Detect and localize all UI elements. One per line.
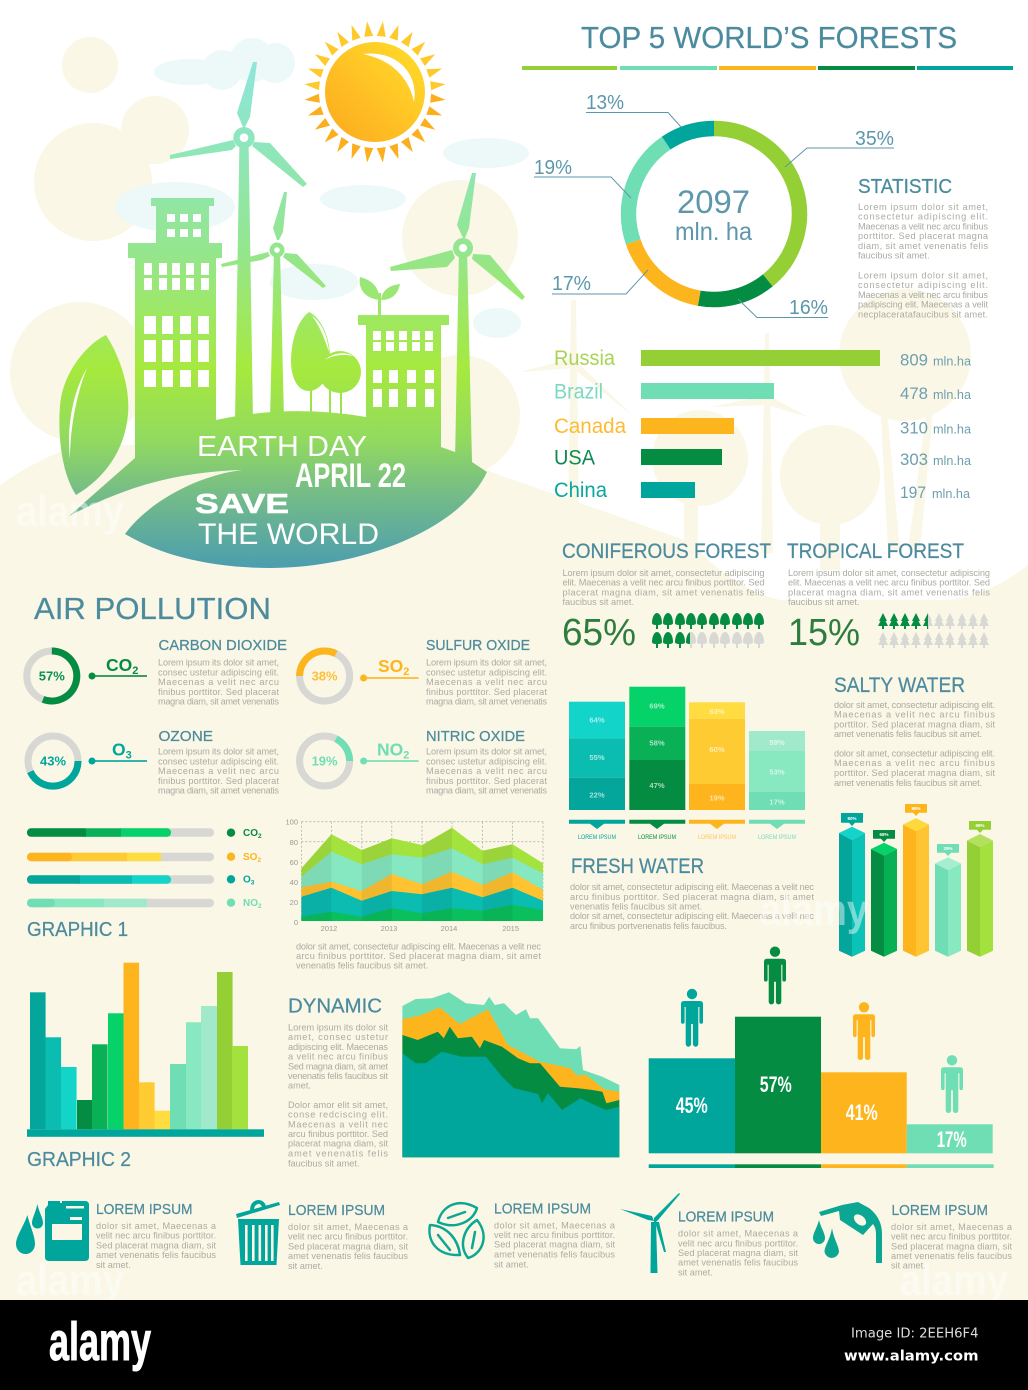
donut chart: forests share	[534, 92, 894, 319]
statistic text: padipiscing elit. Maecenas a velit	[858, 300, 988, 310]
panel: ozone: finibus porttitor. Sed placerat	[158, 776, 279, 786]
statistic text: Lorem ipsum dolor sit amet,	[858, 202, 988, 212]
panel: nitric oxide	[300, 728, 547, 796]
watermark marks: alamy	[16, 487, 124, 536]
panel: nitric oxide: 19%	[312, 754, 338, 768]
chart: stacked area: 2012	[321, 924, 337, 933]
item: fuel nozzle: sit amet.	[891, 1261, 926, 1271]
footer bar: www.alamy.com	[844, 1349, 978, 1365]
text: dynamic: amet.	[288, 1081, 311, 1091]
statistic text: STATISTIC	[858, 176, 952, 198]
legend: NO	[243, 898, 258, 909]
item: canister: amet venenatis felis faucibus	[96, 1250, 216, 1260]
text: fresh water: dolor sit amet, consectetur adipiscing elit. Maecenas a velit nec	[570, 882, 814, 892]
item: wind turbine	[620, 1193, 799, 1277]
donut chart: forests share: 35%	[855, 128, 894, 150]
panel: nitric oxide: Maecenas a velit nec arcu	[426, 766, 547, 776]
legend: O	[243, 875, 251, 886]
text: salty water: SALTY WATER	[834, 674, 965, 697]
text: fresh water: arcu finibus porttitor. Sed placerat magna diam, sit amet	[570, 892, 814, 902]
item: recycling leaves	[429, 1200, 616, 1269]
item: recycling leaves: sit amet.	[494, 1259, 529, 1269]
text: dynamic: arcu finibus porttitor. Sed	[288, 1129, 388, 1139]
legend: CO	[243, 828, 258, 839]
icon row: round trees	[652, 613, 764, 648]
chart: stacked area: 2014	[441, 924, 457, 933]
panel: coniferous forest: Lorem ipsum dolor sit amet, consectetur adipiscing	[562, 568, 764, 578]
item: trash bin: sit amet.	[288, 1261, 323, 1271]
value tags: 68%	[879, 832, 889, 837]
item: canister: dolor sit amet, Maecenas a	[96, 1221, 217, 1231]
panel: nitric oxide: finibus porttitor. Sed placerat	[426, 776, 547, 786]
panel: sulfur oxide: consec ustetur adipiscing elit.	[426, 668, 547, 678]
bar chart: forest area by country: 310	[900, 418, 928, 438]
chart: dynamic area	[402, 992, 619, 1157]
panel: coniferous forest: placerat magna diam, sit amet venenatis felis	[562, 588, 765, 598]
panel: ozone: O	[112, 740, 126, 760]
chart: stacked area: venenatis felis faucibus sit amet.	[296, 960, 428, 970]
donut chart: forests share: 16%	[789, 297, 828, 319]
clouds and sun	[304, 21, 446, 163]
item: fuel nozzle: LOREM IPSUM	[892, 1202, 988, 1219]
panel: ozone: consec ustetur adipiscing elit.	[158, 756, 279, 766]
panel: coniferous forest: elit. Maecenas a velit nec arcu finibus porttitor. Sed	[562, 578, 764, 588]
bar chart: forest area by country: China	[554, 479, 607, 502]
illustration: green city	[59, 21, 525, 568]
panel: carbon dioxide: magna diam, sit amet venenatis	[158, 696, 279, 706]
panel: nitric oxide: 2	[403, 750, 409, 762]
item: recycling leaves: Sed placerat magna diam, sit	[494, 1240, 615, 1250]
item: fuel nozzle: amet venenatis felis faucibus	[891, 1251, 1012, 1261]
panel: carbon dioxide	[27, 637, 287, 706]
item: fuel nozzle: Sed placerat magna diam, sit	[891, 1241, 1012, 1251]
icons: people	[681, 946, 963, 1113]
chart: graphic 2 bars: GRAPHIC 2	[27, 1149, 131, 1171]
statistic text: Maecenas a velit nec arcu finibus	[858, 221, 988, 231]
banner text: APRIL 22	[295, 457, 406, 495]
item: wind turbine: sit amet.	[678, 1267, 713, 1277]
bar chart: forest area by country: mln.ha	[933, 453, 972, 468]
item: wind turbine: dolor sit amet, Maecenas a	[678, 1229, 799, 1239]
building windows	[69, 133, 467, 459]
bar chart: forest area by country: 809	[900, 350, 928, 370]
text: dynamic: placerat magna diam, sit	[288, 1139, 388, 1149]
bar chart: forest area by country: Russia	[554, 347, 615, 370]
chart: stacked bars fresh water: 55%	[589, 753, 605, 762]
panel: ozone: magna diam, sit amet venenatis	[158, 786, 279, 796]
panel: ozone: OZONE	[158, 728, 213, 745]
banner text: THE WORLD	[198, 518, 379, 551]
statistic text: Lorem ipsum dolor sit amet,	[858, 270, 988, 280]
bar chart: forest area by country: mln.ha	[933, 354, 972, 368]
panel: ozone: Maecenas a velit nec arcu	[158, 766, 279, 776]
item: canister: sit amet.	[96, 1260, 131, 1270]
item: recycling leaves: LOREM IPSUM	[494, 1200, 591, 1217]
panel: carbon dioxide: Maecenas a velit nec arcu	[158, 677, 279, 687]
footer bar	[0, 1300, 1028, 1390]
watermark marks: alamy	[16, 1256, 124, 1305]
legend	[227, 828, 262, 910]
text: salty water: amet venenatis felis faucibus sit amet.	[834, 778, 982, 788]
panel: ozone: 3	[126, 750, 132, 762]
chart: isometric columns	[839, 804, 993, 957]
text: salty water: Maecenas a velit nec arcu finibus	[834, 710, 995, 720]
text: dynamic: amet, consec ustetur	[288, 1032, 388, 1042]
chart: stacked area: 100	[285, 818, 298, 826]
icon: recycling leaves	[429, 1203, 484, 1258]
panel: nitric oxide: Lorem ipsum its dolor sit amet,	[426, 746, 547, 756]
panel: sulfur oxide: Lorem ipsum its dolor sit amet,	[426, 658, 547, 668]
item: wind turbine: LOREM IPSUM	[678, 1209, 774, 1226]
item: canister: LOREM IPSUM	[96, 1201, 192, 1218]
text: salty water: porttitor. Sed placerat magna diam, sit	[834, 768, 995, 778]
panel: carbon dioxide: CO	[106, 655, 132, 675]
chart: stacked area: 40	[290, 878, 298, 887]
panel: sulfur oxide	[300, 637, 547, 706]
item: trash bin	[236, 1200, 409, 1271]
chart: stacked bars fresh water: 63%	[709, 707, 725, 716]
text: salty water: Maecenas a velit nec arcu finibus	[834, 758, 995, 768]
text: dynamic: conse redciscing elit.	[288, 1110, 388, 1120]
banner text: EARTH DAY	[197, 431, 367, 463]
heading: air pollution: AIR POLLUTION	[34, 592, 271, 626]
icon: canister and drops	[16, 1201, 89, 1261]
item: recycling leaves: amet venenatis felis faucibus	[494, 1249, 615, 1259]
legend: 2	[258, 903, 262, 910]
bar chart: forest area by country	[554, 347, 972, 502]
legend: 3	[251, 880, 255, 887]
donut chart: forests share: 13%	[586, 92, 624, 114]
panel: coniferous forest	[562, 540, 771, 654]
chart: graphic 1 progress bars: GRAPHIC 1	[27, 919, 128, 941]
panel: tropical forest: 15%	[788, 612, 860, 654]
item: canister	[16, 1201, 217, 1270]
bar chart: forest area by country: 478	[900, 384, 928, 403]
chart: stacked area: dolor sit amet, consectetur adipiscing elit. Maecenas a velit nec	[296, 942, 541, 952]
text: salty water: dolor sit amet, consectetur adipiscing elit.	[834, 700, 995, 710]
statistic text: porttitor. Sed placerat magna	[858, 231, 989, 241]
text: dynamic: Lorem ipsum its dolor sit	[288, 1022, 388, 1032]
chart: stacked area: 2015	[502, 924, 519, 933]
panel: tropical forest: Lorem ipsum dolor sit amet, consectetur adipiscing	[788, 568, 990, 578]
value tags: 80%	[847, 816, 857, 821]
text: salty water	[834, 674, 995, 788]
bar chart: forest area by country: Canada	[554, 415, 626, 438]
panel: carbon dioxide: consec ustetur adipiscing elit.	[158, 668, 279, 678]
text: fresh water: FRESH WATER	[571, 855, 704, 878]
city silhouette	[59, 62, 525, 568]
category ribbons	[569, 820, 805, 841]
text: fresh water	[570, 855, 814, 931]
panel: sulfur oxide: SULFUR OXIDE	[426, 637, 530, 654]
chart: stacked area: 20	[290, 898, 298, 907]
chart: stacked bars fresh water: 69%	[649, 702, 665, 710]
chart: stacked bars fresh water: 53%	[769, 768, 785, 776]
text: dynamic: Sed magna diam, sit amet	[288, 1061, 388, 1071]
panel: sulfur oxide: 2	[403, 666, 409, 678]
item: trash bin: dolor sit amet, Maecenas a	[288, 1222, 409, 1232]
chart: stacked bars fresh water	[569, 687, 805, 841]
panel: nitric oxide: consec ustetur adipiscing elit.	[426, 756, 547, 766]
item: fuel nozzle: velit nec arcu finibus porttitor.	[891, 1232, 1012, 1242]
panel: sulfur oxide: finibus porttitor. Sed placerat	[426, 687, 547, 697]
panel: carbon dioxide: 2	[132, 665, 138, 677]
panel: coniferous forest: faucibus sit amet.	[562, 597, 634, 607]
panel: carbon dioxide: 57%	[39, 668, 65, 684]
watermark marks: alamy	[760, 886, 868, 935]
text: dynamic: faucibus sit amet.	[288, 1158, 360, 1168]
statistic text: faucibus sit amet.	[858, 251, 930, 261]
panel: nitric oxide: magna diam, sit amet venenatis	[426, 786, 547, 796]
item: trash bin: velit nec arcu finibus porttitor.	[288, 1232, 408, 1242]
panel: tropical forest: elit. Maecenas a velit nec arcu finibus porttitor. Sed	[788, 578, 990, 588]
text: dynamic	[288, 996, 388, 1168]
bar chart: forest area by country: USA	[554, 446, 595, 470]
text: salty water: porttitor. Sed placerat magna diam, sit	[834, 719, 995, 729]
panel: carbon dioxide: finibus porttitor. Sed placerat	[158, 687, 279, 697]
donut chart: forests share: 2097	[677, 184, 750, 220]
statistic text: diam, sit amet venenatis felis	[858, 241, 988, 251]
item: fuel nozzle: dolor sit amet, Maecenas a	[891, 1222, 1013, 1232]
chart: stacked bars fresh water: 64%	[589, 716, 605, 724]
item: canister: Sed placerat magna diam, sit	[96, 1240, 216, 1250]
panel: ozone: 43%	[40, 754, 66, 768]
statistic text: consectetur adipiscing elit.	[858, 280, 988, 290]
item: wind turbine: Sed placerat magna diam, sit	[678, 1248, 798, 1258]
category ribbons: LOREM IPSUM	[758, 835, 796, 841]
chart: stacked bars fresh water: 47%	[649, 781, 665, 790]
bar chart: forest area by country: mln.ha	[933, 422, 972, 436]
chart: stacked bars fresh water: 17%	[769, 798, 785, 806]
chart: stacked bars fresh water: 58%	[649, 738, 665, 748]
item: recycling leaves: dolor sit amet, Maecenas a	[494, 1220, 616, 1230]
chart: stacked bars fresh water: 59%	[769, 738, 785, 747]
chart: people steps: 45%	[676, 1093, 708, 1118]
panel: sulfur oxide: 38%	[312, 668, 338, 684]
text: dynamic: venenatis felis faucibus sit	[288, 1071, 388, 1081]
watermark marks: alamy	[900, 1256, 1008, 1305]
chart: graphic 1 progress bars	[27, 828, 262, 941]
text: salty water: dolor sit amet, consectetur adipiscing elit.	[834, 748, 995, 758]
panel: carbon dioxide: CARBON DIOXIDE	[158, 637, 287, 654]
chart: people steps: 41%	[846, 1100, 878, 1125]
title: top 5 world's forests	[522, 21, 1013, 70]
item: fuel nozzle	[813, 1202, 1013, 1271]
panel: tropical forest	[787, 540, 990, 654]
text: salty water: amet venenatis felis faucibus sit amet.	[834, 729, 982, 739]
value tags: 98%	[911, 806, 921, 811]
item: trash bin: amet venenatis felis faucibus	[288, 1251, 408, 1261]
banner text	[195, 431, 406, 551]
chart: people steps: 17%	[937, 1127, 967, 1152]
text: dynamic: a velit nec arcu finibus	[288, 1052, 388, 1062]
panel: sulfur oxide: Maecenas a velit nec arcu	[426, 677, 547, 687]
text: dynamic: adipiscing elit. Maecenas	[288, 1042, 388, 1052]
text: fresh water: dolor sit amet, consectetur adipiscing elit. Maecenas a velit nec	[570, 911, 814, 921]
icon row: pine trees	[878, 613, 989, 648]
footer bar: alamy	[49, 1312, 151, 1372]
category ribbons: LOREM IPSUM	[578, 835, 616, 841]
statistic text: necplaceratafaucibus sit amet.	[858, 309, 988, 319]
panel: coniferous forest: CONIFEROUS FOREST	[562, 540, 771, 563]
panel: tropical forest: placerat magna diam, sit amet venenatis felis	[788, 588, 990, 598]
bar chart: forest area by country: 303	[900, 450, 928, 469]
value tags: 68%	[975, 823, 985, 828]
panel: nitric oxide: NO	[377, 740, 403, 760]
category ribbons: LOREM IPSUM	[698, 835, 736, 841]
chart: stacked area	[285, 818, 543, 970]
chart: stacked area: arcu finibus porttitor. Sed placerat magna diam, sit amet	[296, 951, 541, 961]
chart: stacked area: 2013	[381, 924, 397, 933]
bar chart: forest area by country: mln.ha	[932, 486, 971, 501]
statistic text: consectetur adipiscing elit.	[858, 212, 988, 222]
chart: stacked bars fresh water: 60%	[709, 745, 725, 754]
item: recycling leaves: velit nec arcu finibus porttitor.	[494, 1230, 615, 1240]
legend: SO	[243, 852, 257, 863]
chart: stacked area: 0	[294, 918, 298, 927]
statistic text: Maecenas a velit nec arcu finibus	[858, 290, 988, 300]
icon: fuel nozzle and drops	[813, 1202, 882, 1263]
text: fresh water: venenatis felis faucibus sit amet.	[570, 902, 702, 912]
text: dynamic: Maecenas a velit nec	[288, 1119, 388, 1129]
category ribbons: LOREM IPSUM	[638, 835, 676, 841]
value tags: 29%	[943, 846, 953, 851]
panel: tropical forest: faucibus sit amet.	[788, 597, 860, 607]
item: trash bin: Sed placerat magna diam, sit	[288, 1241, 408, 1251]
donut chart: forests share: 17%	[552, 273, 591, 295]
value tags	[841, 804, 991, 856]
chart: stacked area: 80	[290, 838, 298, 847]
bar chart: forest area by country: Brazil	[554, 380, 603, 404]
watermark marks	[16, 487, 1008, 1305]
panel: ozone: Lorem ipsum its dolor sit amet,	[158, 746, 279, 756]
donut chart: forests share: 19%	[534, 157, 572, 179]
text: dynamic: DYNAMIC	[288, 996, 382, 1018]
text: dynamic: Dolor amor elit sit amet,	[288, 1100, 388, 1110]
chart: stacked bars fresh water: 22%	[589, 790, 605, 800]
bar chart: forest area by country: mln.ha	[933, 387, 972, 402]
chart: graphic 2 bars	[27, 963, 264, 1171]
panel: sulfur oxide: magna diam, sit amet venenatis	[426, 696, 547, 706]
panel: tropical forest: TROPICAL FOREST	[787, 540, 964, 563]
item: wind turbine: amet venenatis felis faucibus	[678, 1258, 798, 1268]
chart: stacked bars fresh water: 19%	[709, 794, 725, 802]
chart: stacked area: 60	[290, 858, 298, 867]
panel: carbon dioxide: Lorem ipsum its dolor sit amet,	[158, 658, 279, 668]
item: trash bin: LOREM IPSUM	[288, 1202, 385, 1219]
chart: people steps	[649, 946, 994, 1168]
panel: nitric oxide: NITRIC OXIDE	[426, 728, 525, 745]
footer bar: Image ID: 2EEH6F4	[851, 1327, 978, 1342]
legend: 2	[257, 857, 261, 864]
chart: people steps: 57%	[760, 1072, 792, 1097]
donut chart: forests share: mln. ha	[675, 218, 752, 246]
bar chart: forest area by country: 197	[900, 483, 926, 502]
item: canister: velit nec arcu finibus porttitor.	[96, 1231, 216, 1241]
panel: ozone	[28, 728, 279, 796]
item: wind turbine: velit nec arcu finibus porttitor.	[678, 1238, 798, 1248]
panel: sulfur oxide: SO	[378, 656, 403, 676]
icon: wind turbine	[620, 1193, 680, 1273]
text: fresh water: arcu finibus portvenenatis felis faucibus.	[570, 921, 727, 931]
banner text: SAVE	[195, 488, 289, 519]
statistic text	[858, 176, 989, 319]
text: dynamic: amet venenatis felis	[288, 1149, 388, 1159]
icon: trash bin	[236, 1200, 280, 1265]
panel: coniferous forest: 65%	[562, 612, 636, 654]
title: top 5 world's forests: TOP 5 WORLD’S FORESTS	[581, 21, 957, 55]
legend: 2	[258, 833, 262, 840]
